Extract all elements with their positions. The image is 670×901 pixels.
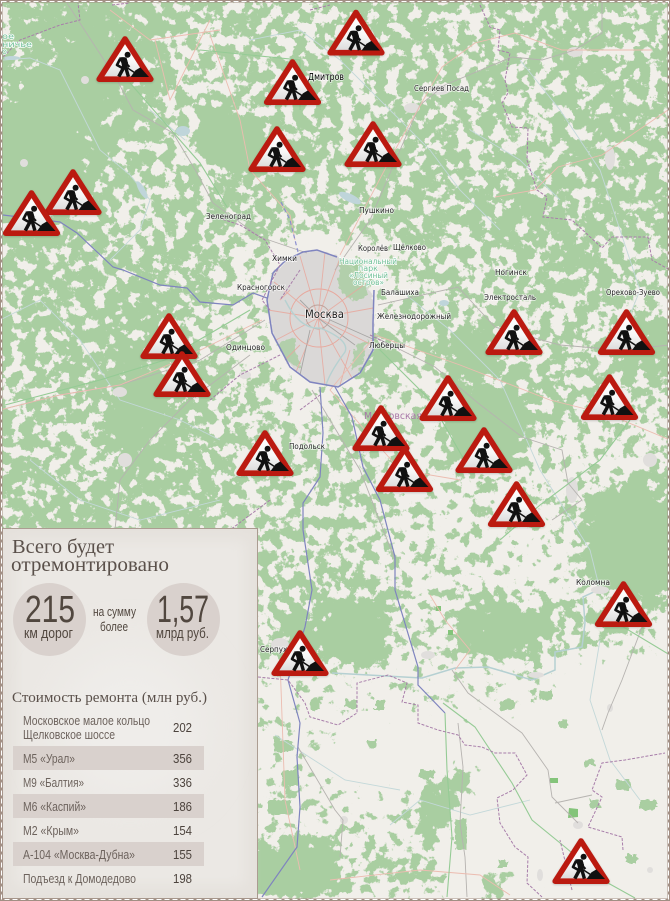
- map labels: Пушкино: [359, 206, 394, 215]
- map labels: Люберцы: [369, 341, 405, 350]
- map labels: Щёлково: [393, 243, 426, 252]
- panel heading: [11, 536, 169, 576]
- map labels: о: [2, 47, 7, 56]
- row: Moscow small ring: Московское малое кольцо: [23, 713, 150, 728]
- map labels: Красногорск: [237, 283, 285, 292]
- stat circle: road length: 215: [25, 589, 75, 631]
- map labels: Сергиев Посад: [414, 84, 469, 93]
- stat circle: total cost: млрд руб.: [156, 625, 209, 642]
- row: M9: [23, 775, 192, 790]
- row: Domodedovo: Подъезд к Домодедово: [23, 871, 136, 886]
- motorways: [3, 200, 445, 897]
- row: M6: [23, 799, 192, 814]
- row: A-104: 155: [173, 847, 192, 862]
- map labels: [2, 32, 660, 654]
- stat circle: total cost: [147, 583, 220, 656]
- row: Domodedovo: 198: [173, 871, 192, 886]
- map labels: остров»: [353, 278, 384, 287]
- sign 5: [347, 124, 399, 165]
- map labels: Москва: [305, 307, 344, 321]
- table heading: Стоимость ремонта (млн руб.): [12, 690, 207, 706]
- row: M5: [23, 751, 192, 766]
- sign 11: [488, 312, 540, 353]
- panel: repair summary: [2, 528, 258, 898]
- connector text: более: [100, 619, 128, 634]
- sign 1: [99, 39, 151, 80]
- map labels: Электросталь: [484, 293, 536, 302]
- map labels: Ногинск: [495, 268, 527, 277]
- sign 4: [251, 129, 303, 170]
- map labels: Зеленоград: [206, 212, 251, 221]
- map labels: Железнодорожный: [377, 312, 451, 321]
- row: M5: 356: [173, 751, 192, 766]
- map labels: ое: [2, 32, 14, 41]
- row: M2: [23, 823, 192, 838]
- scattered forest specks in the south: [268, 690, 656, 868]
- map labels: Подольск: [289, 442, 325, 451]
- map labels: «Лосиный: [349, 271, 388, 280]
- sign 8: [143, 316, 195, 357]
- stat circle: road length: км дорог: [24, 625, 73, 642]
- sign 19: [598, 584, 649, 625]
- map labels: ничье: [2, 40, 32, 49]
- map labels: Балашиха: [381, 288, 419, 297]
- row: M2: 154: [173, 823, 192, 838]
- sign 12: [601, 312, 652, 353]
- sign 7: [6, 193, 57, 234]
- row: M6: М6 «Каспий»: [23, 799, 86, 814]
- map labels: Орехово-Зуево: [606, 288, 660, 297]
- map labels: Королёв: [358, 244, 388, 253]
- sign 14: [422, 378, 474, 419]
- row: M9: 336: [173, 775, 192, 790]
- map labels: Московская: [364, 411, 422, 422]
- sign 10: [239, 433, 291, 474]
- row: Moscow small ring: 202: [173, 720, 192, 735]
- saturated parks: [436, 606, 578, 818]
- sign 16: [379, 449, 430, 490]
- map labels: Химки: [272, 254, 297, 263]
- map labels: Коломна: [576, 578, 610, 587]
- sign 21: [555, 841, 607, 882]
- row: M6: 186: [173, 799, 192, 814]
- row: A-104: А-104 «Москва-Дубна»: [23, 847, 135, 862]
- sign 13: [584, 377, 635, 418]
- row: M5: М5 «Урал»: [23, 751, 75, 766]
- sign 20: [274, 633, 326, 674]
- row: M2: М2 «Крым»: [23, 823, 79, 838]
- sign 18: [491, 484, 542, 525]
- row: Moscow small ring: [23, 713, 192, 742]
- sign 15: [355, 408, 407, 449]
- sign 2: [330, 12, 382, 54]
- panel heading: Всего будет: [12, 536, 114, 558]
- stat circle: road length: [13, 583, 86, 656]
- connector text: на сумму: [93, 604, 136, 619]
- Moscow urban area: [268, 250, 375, 387]
- cost table: [13, 713, 204, 886]
- map labels: Национальный: [339, 257, 397, 266]
- panel heading: отремонтировано: [11, 554, 169, 576]
- sign 17: [458, 430, 510, 471]
- map labels: Дмитров: [308, 72, 344, 83]
- sign 9: [156, 354, 208, 395]
- sign 3: [267, 62, 318, 103]
- stat circle: total cost: 1,57: [157, 589, 209, 631]
- row: M9: М9 «Балтия»: [23, 775, 84, 790]
- map labels: Одинцово: [226, 343, 265, 352]
- map labels: Серпухов: [260, 645, 296, 654]
- connector text: [93, 604, 136, 634]
- water bodies: [4, 56, 449, 306]
- map labels: парк: [358, 264, 378, 273]
- row: Moscow small ring: Щелковское шоссе: [23, 727, 115, 742]
- sign 6: [47, 172, 99, 213]
